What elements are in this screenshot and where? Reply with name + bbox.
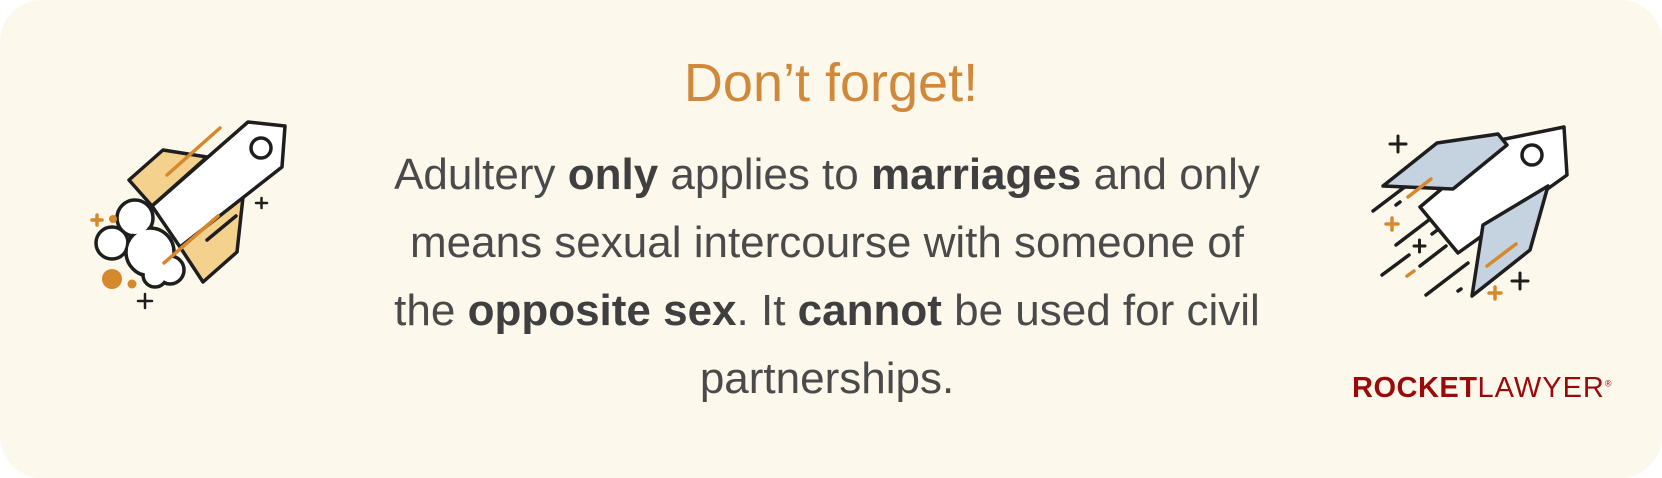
text block: body bbox=[394, 150, 1260, 403]
text block: body: means sexual intercourse with someone of bbox=[410, 218, 1244, 267]
text block: body: the opposite sex. It cannot be used for civil bbox=[394, 286, 1260, 335]
text block: body: partnerships. bbox=[700, 354, 954, 403]
logo: Rocket Lawyer: ROCKETLAWYER® bbox=[1352, 372, 1612, 404]
title: Don’t forget! bbox=[684, 53, 978, 113]
text block: body: Adultery only applies to marriages and only bbox=[394, 150, 1260, 199]
